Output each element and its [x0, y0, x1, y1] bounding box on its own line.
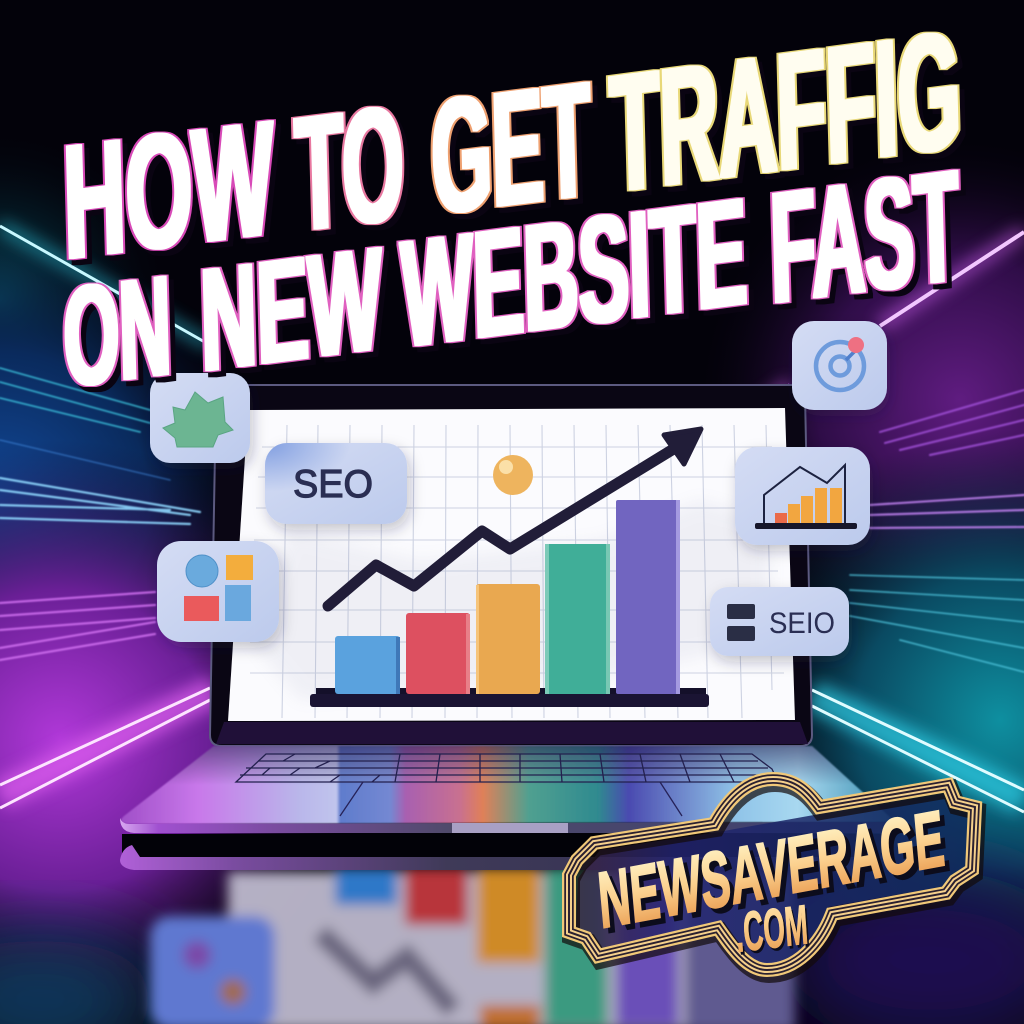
icon: orange square [226, 555, 253, 580]
blurred reflection of laptop [150, 868, 795, 1024]
lower bezel glow [216, 722, 808, 744]
mirrored lip [120, 845, 880, 870]
bar: orange [476, 584, 540, 694]
hinge notch [452, 823, 568, 833]
title [61, 0, 963, 418]
icon: two dark blocks [727, 604, 755, 641]
title line 2 [62, 137, 961, 418]
icon: bullseye target [816, 342, 864, 390]
wordmark .COM: .COM [733, 893, 810, 964]
title line 1: TO [293, 70, 406, 266]
chart back rail [316, 688, 706, 696]
chart base [310, 694, 709, 707]
icon: green star badge [163, 392, 233, 447]
bar: blue [335, 636, 400, 694]
title: GET [429, 47, 593, 249]
neon speed lines right [850, 390, 1024, 672]
floating card: SEIO [710, 587, 849, 656]
wordmark .COM: .COM [735, 896, 812, 967]
icon: trend line [764, 465, 845, 523]
icon: red dart tip [848, 337, 864, 353]
bar: red [406, 613, 470, 694]
shadow under laptop [122, 834, 896, 857]
ball: orange sphere [493, 455, 533, 495]
neon speed lines left [0, 368, 200, 660]
icon: chart base [755, 523, 857, 529]
laptop screen with grid [228, 408, 795, 721]
floating card: green badge [150, 373, 250, 463]
laptop lid and bezel [210, 385, 812, 746]
floating card: SEIO: SEIO [769, 607, 835, 640]
bar: purple [616, 500, 680, 694]
floating card: shapes palette [157, 541, 279, 642]
floating card: target [792, 321, 887, 410]
icon: blue circle [186, 555, 218, 587]
floating card: SEO: SEO [293, 463, 373, 506]
floating card: SEO [265, 443, 407, 524]
logo badge: newsaverage.com [569, 779, 977, 974]
floating card: mini bar chart [735, 447, 870, 545]
badge inner panel [576, 792, 968, 963]
bar chart [310, 500, 709, 707]
title line 2: ON [62, 246, 173, 418]
bright neon beam: upper right [755, 232, 1024, 408]
badge art-deco frame [569, 779, 977, 974]
title line 2: NEW [199, 217, 384, 403]
bright neon beam: lower left [0, 688, 215, 808]
icon: orange bars [775, 488, 842, 523]
bright neon beam: upper left [0, 226, 210, 345]
title line 1: HOW [61, 86, 276, 294]
wordmark .COM [733, 893, 812, 967]
laptop [120, 385, 896, 870]
icon: red rectangle [184, 596, 219, 621]
bright neon beam: lower right [812, 690, 1024, 812]
trackpad edges [340, 782, 682, 816]
rising trend arrow [328, 429, 701, 606]
wordmark NEWSAVERAGE [595, 793, 952, 950]
keyboard keys [236, 754, 778, 782]
icon: blue rectangle [225, 585, 251, 621]
laptop front lip [120, 818, 890, 833]
laptop keyboard deck [121, 746, 890, 824]
bar: green [545, 544, 610, 694]
